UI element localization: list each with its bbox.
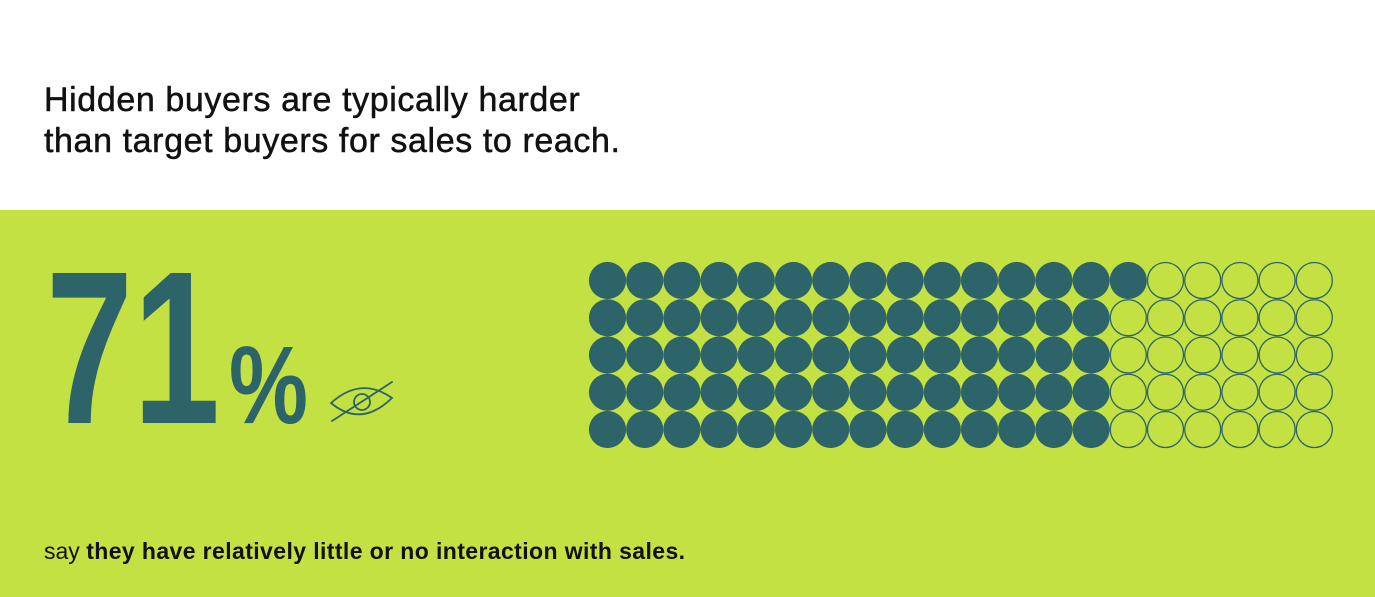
title: than target buyers for sales to reach. [44, 122, 621, 160]
title [44, 81, 621, 160]
title: Hidden buyers are typically harder [44, 81, 580, 119]
icon: crossed eye [330, 381, 394, 422]
dot grid chart: 71 of 100 [588, 262, 1333, 448]
caption: say they have relatively little or no interaction with sales. [44, 538, 685, 564]
panel: green stat [0, 210, 1375, 597]
